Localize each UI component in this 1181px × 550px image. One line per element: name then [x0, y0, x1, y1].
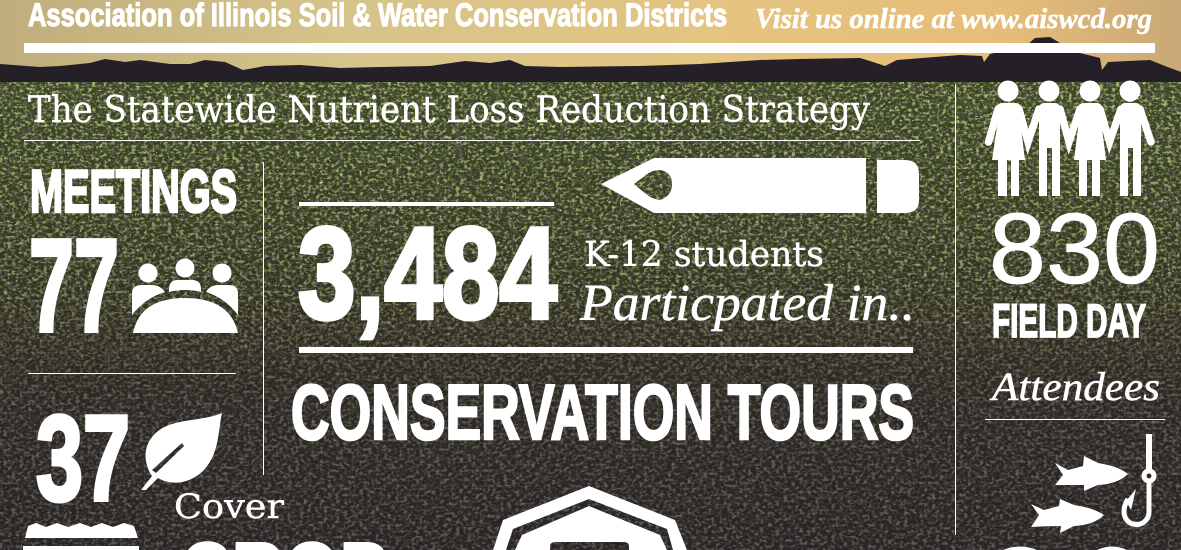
panel: fishing: [1003, 434, 1156, 550]
text: cover: Cover: [174, 487, 285, 527]
title: The Statewide Nutrient Loss Reduction Strategy: [28, 90, 871, 131]
number: cropped figure tops: [1003, 546, 1127, 550]
divider under meetings: [28, 373, 236, 374]
rule below number: [299, 347, 913, 353]
icon: fish lower: [1031, 499, 1104, 533]
header rule: [24, 43, 1155, 53]
panel: field day: [988, 80, 1160, 409]
icon: pencil: [601, 158, 919, 213]
icon: four people holding hands: [988, 80, 1151, 196]
title rule: [24, 140, 920, 141]
panel: cover crop: [23, 413, 384, 550]
rule above number: [299, 202, 554, 206]
icon: fish hook: [1124, 434, 1156, 524]
divider under field day: [985, 419, 1165, 420]
background: tree line: [0, 37, 1181, 84]
background: sky: [0, 0, 1181, 84]
icon: people at table: [132, 258, 238, 333]
number: 77 meetings: 77: [29, 212, 119, 359]
divider: vertical right: [955, 84, 956, 535]
divider: vertical left: [263, 162, 264, 475]
number: 37: 37: [36, 390, 130, 526]
icon: soil layers: [23, 523, 139, 550]
heading: conservation tours: CONSERVATION TOURS: [291, 368, 914, 456]
text: K-12 students: K-12 students: [584, 235, 824, 275]
number: 830: 830: [989, 193, 1160, 305]
heading: meetings: MEETINGS: [30, 158, 237, 225]
panel: meetings: [29, 158, 238, 359]
panel: conservation tours: [291, 158, 919, 550]
text: attendees: Attendees: [989, 364, 1160, 409]
icon: barn: [493, 486, 687, 550]
icon: fish upper: [1055, 456, 1128, 491]
header: website: Visit us online at www.aiswcd.org: [755, 4, 1152, 35]
icon: leaf: [141, 413, 222, 490]
text: participated in: Particpated in..: [579, 275, 915, 332]
number: 3,484: 3,484: [298, 200, 557, 346]
